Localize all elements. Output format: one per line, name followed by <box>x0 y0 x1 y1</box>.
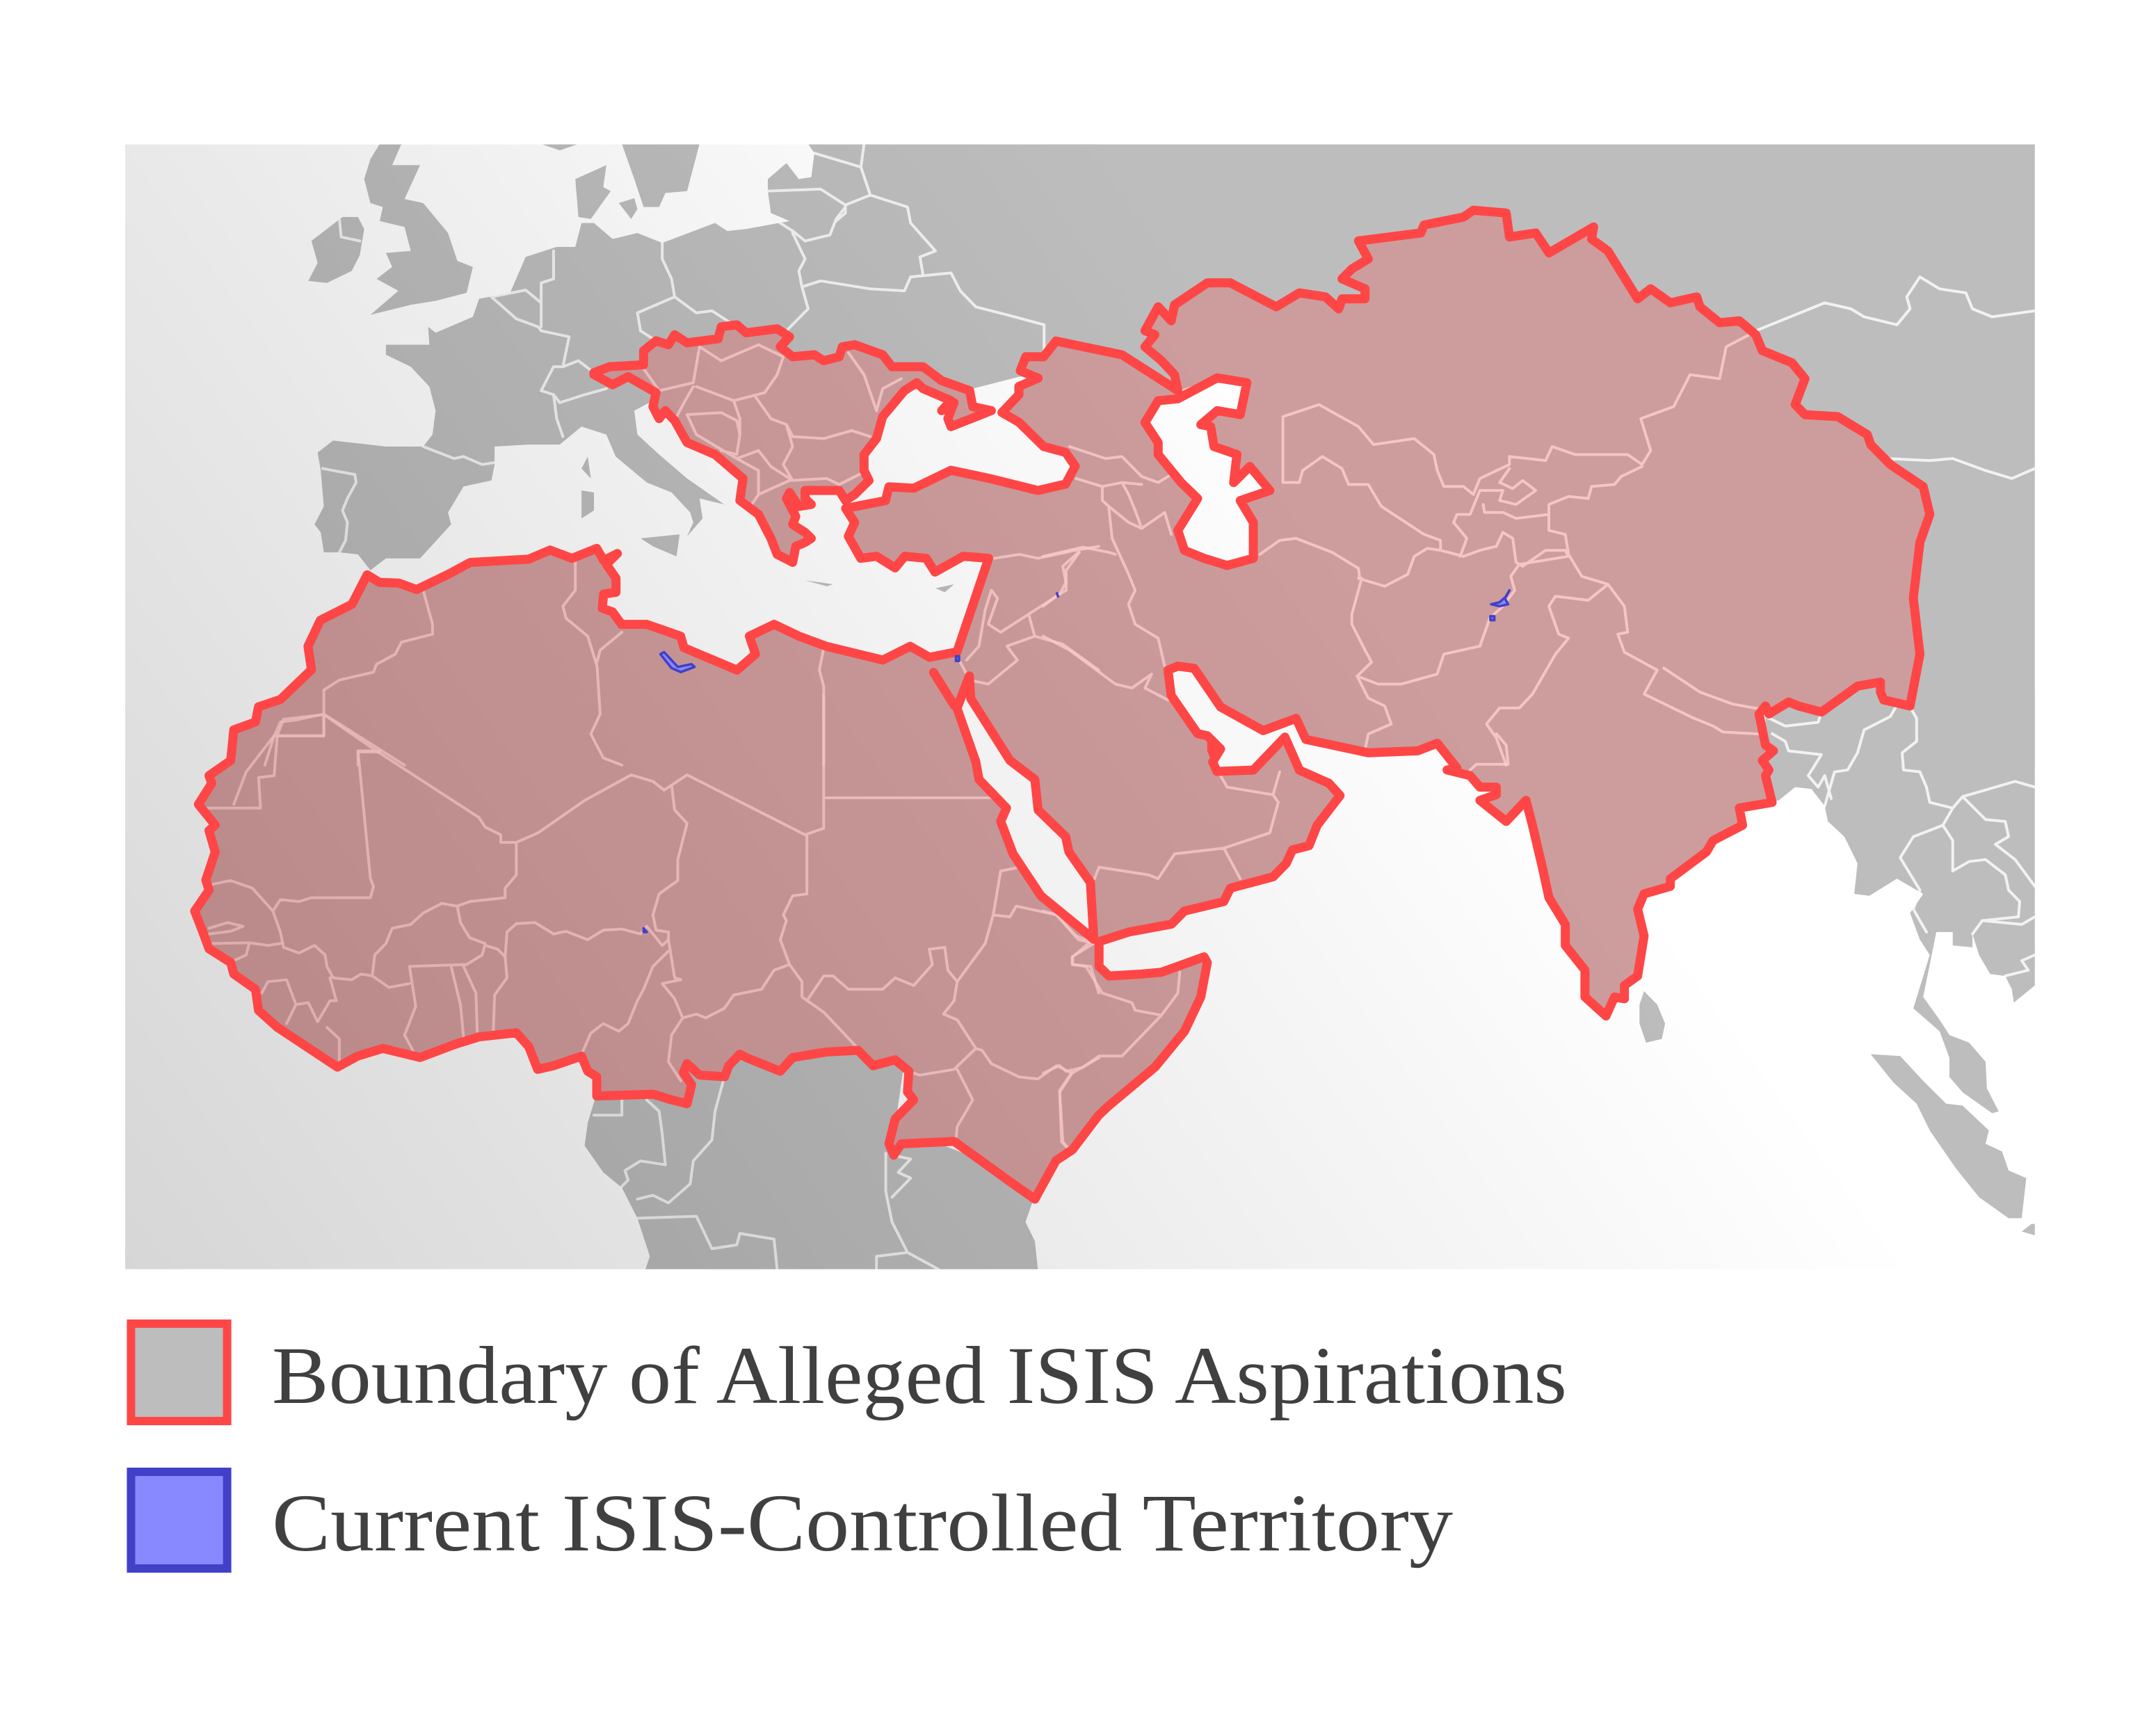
map background <box>125 144 2035 1270</box>
label: territory: Current ISIS-Controlled Territory <box>272 1477 1453 1568</box>
swatch: blue territory <box>131 1472 227 1568</box>
boundary of alleged ISIS aspirations <box>195 210 1930 1199</box>
legend <box>127 1319 1567 1573</box>
country borders <box>206 144 2035 1269</box>
map shading gradient <box>125 145 1550 1269</box>
legend item: territory <box>131 1472 1453 1568</box>
swatch: red boundary <box>131 1324 227 1421</box>
current ISIS-controlled territory <box>643 591 1509 932</box>
Caspian Sea <box>1157 383 1244 422</box>
legend item: aspirations <box>131 1324 1567 1421</box>
land masses <box>195 144 2035 1269</box>
label: boundary: Boundary of Alleged ISIS Aspirations <box>272 1330 1567 1421</box>
map panel <box>125 144 2035 1269</box>
